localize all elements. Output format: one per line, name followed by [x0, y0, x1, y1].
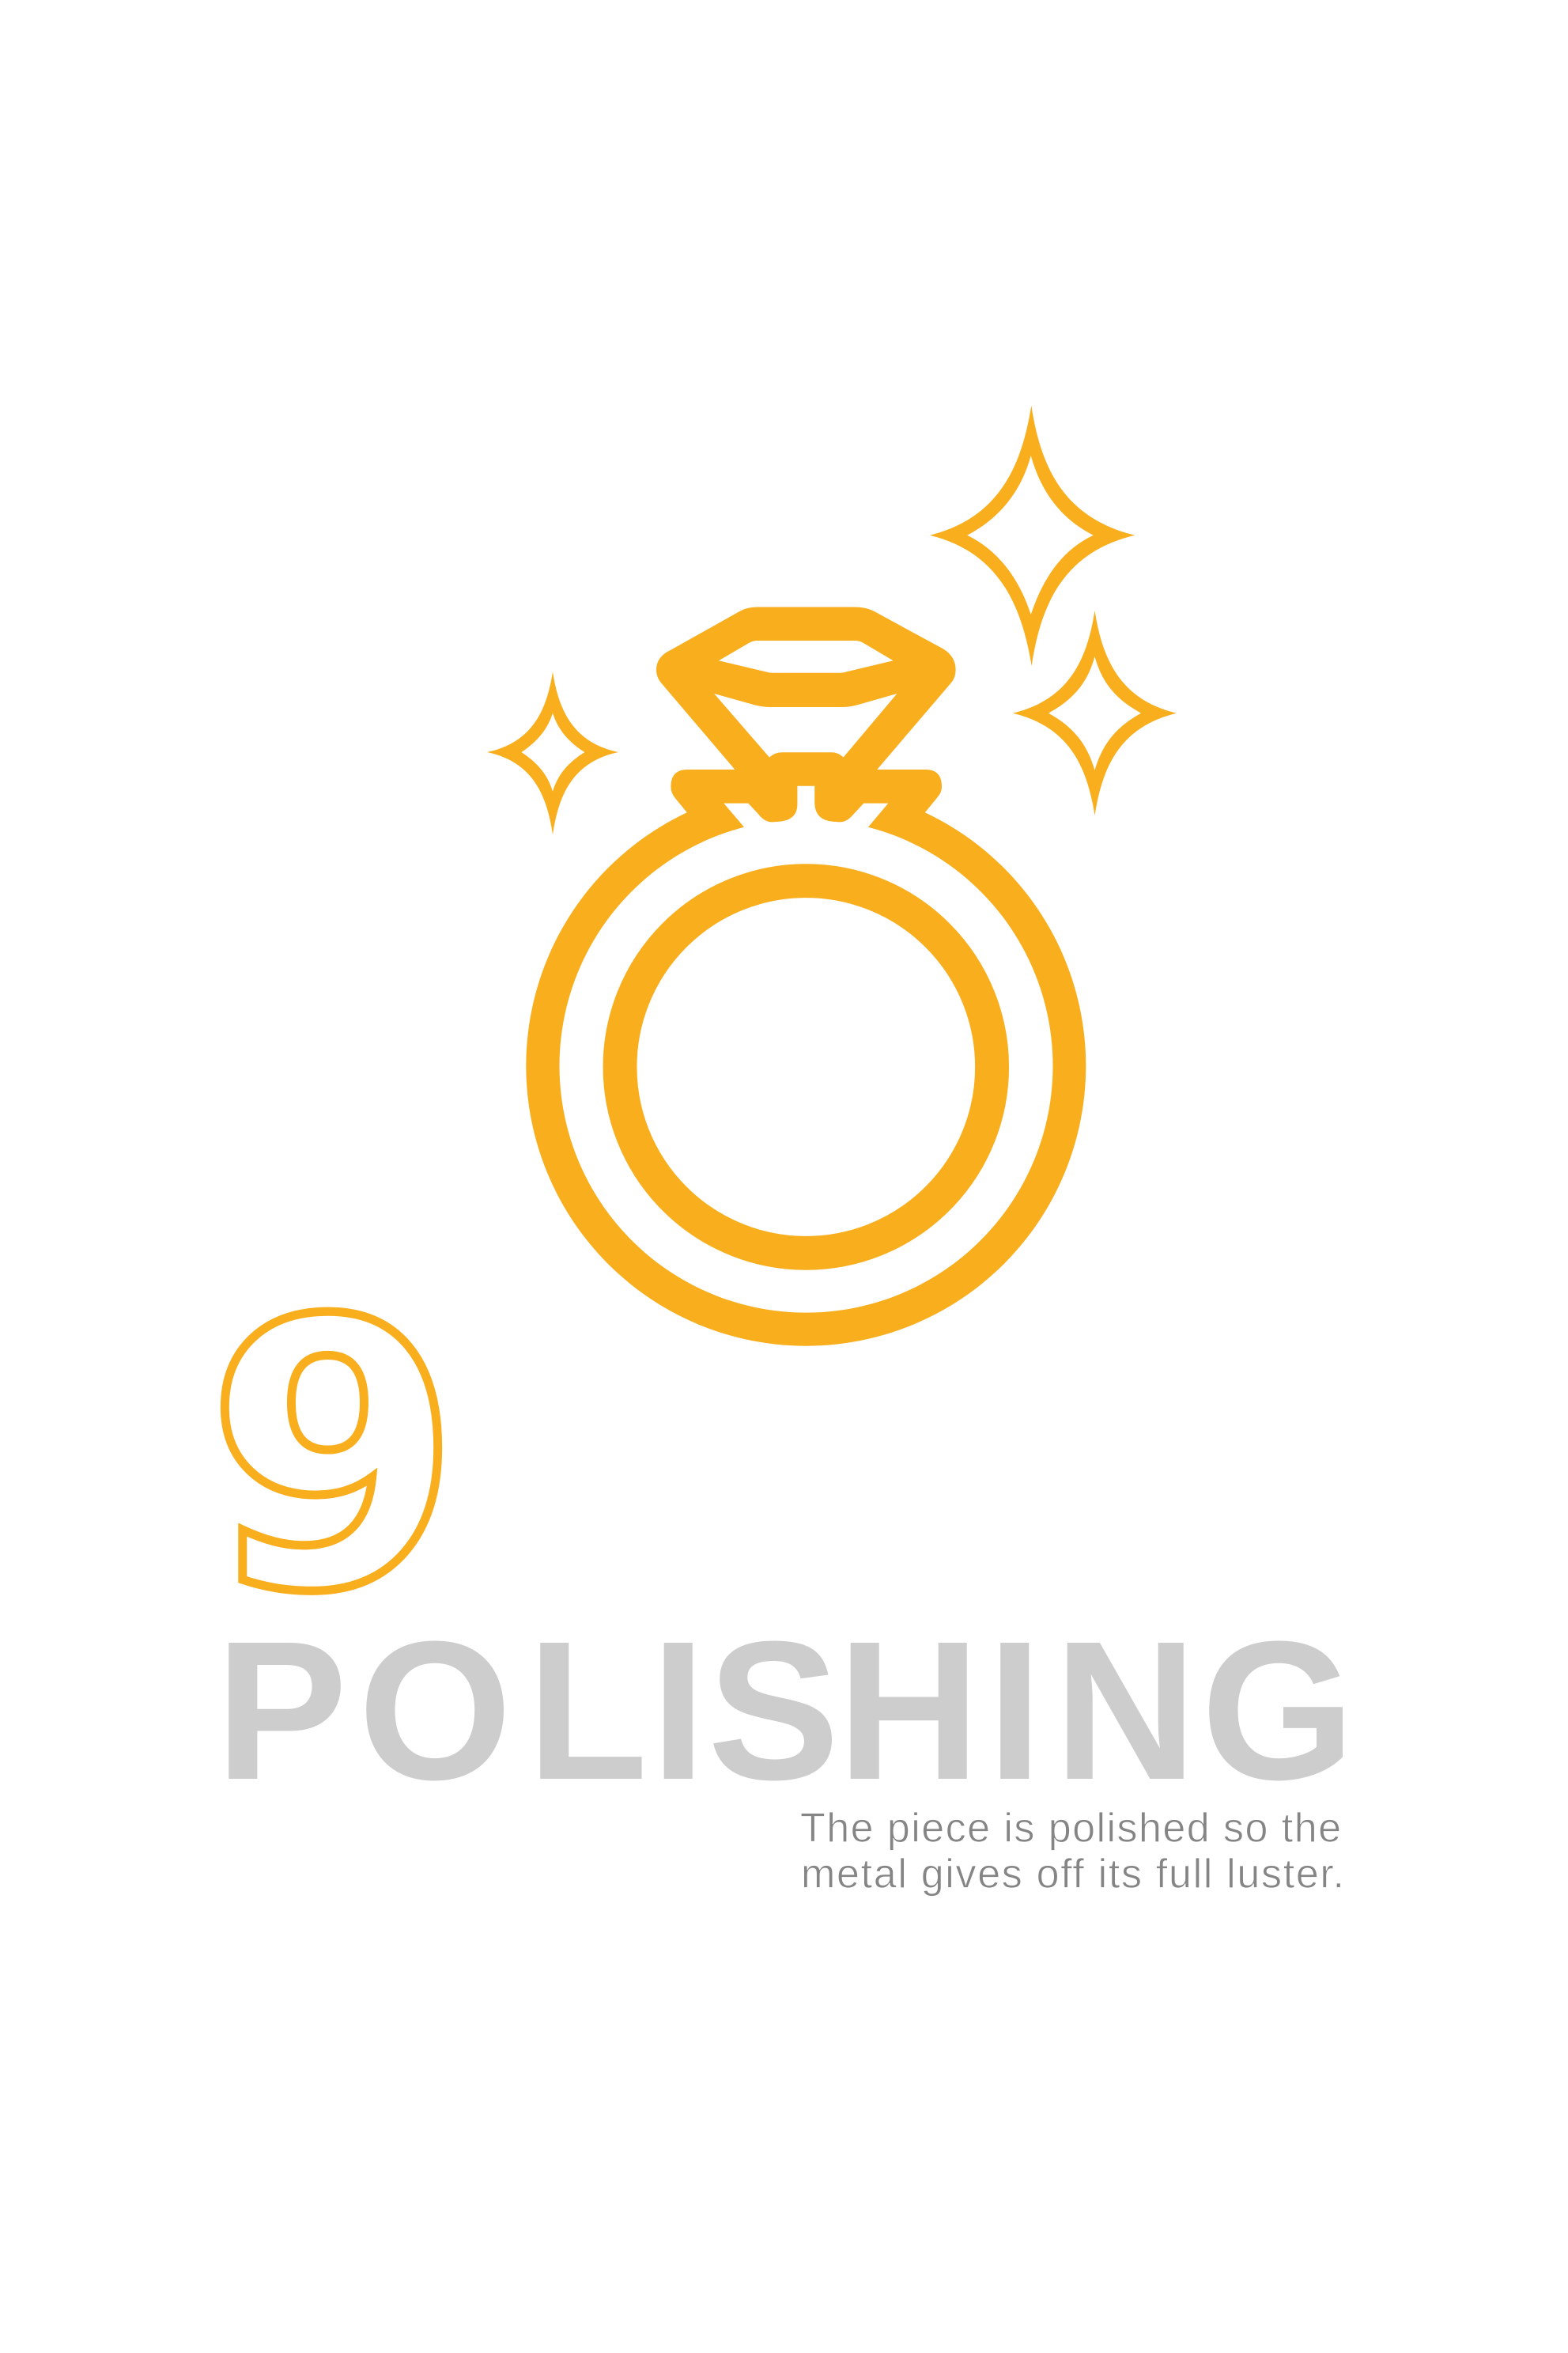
icon: medium sparkle	[1013, 611, 1177, 815]
step number 9: 9	[206, 1243, 461, 1673]
description text	[800, 1805, 1344, 1897]
description text: metal gives off its full luster.	[801, 1852, 1344, 1897]
icon: diamond ring	[526, 607, 1086, 1346]
icon: small sparkle	[487, 671, 618, 834]
heading: POLISHING: POLISHING	[216, 1600, 1355, 1821]
icon: large sparkle	[930, 406, 1135, 666]
description text: The piece is polished so the	[800, 1805, 1341, 1851]
